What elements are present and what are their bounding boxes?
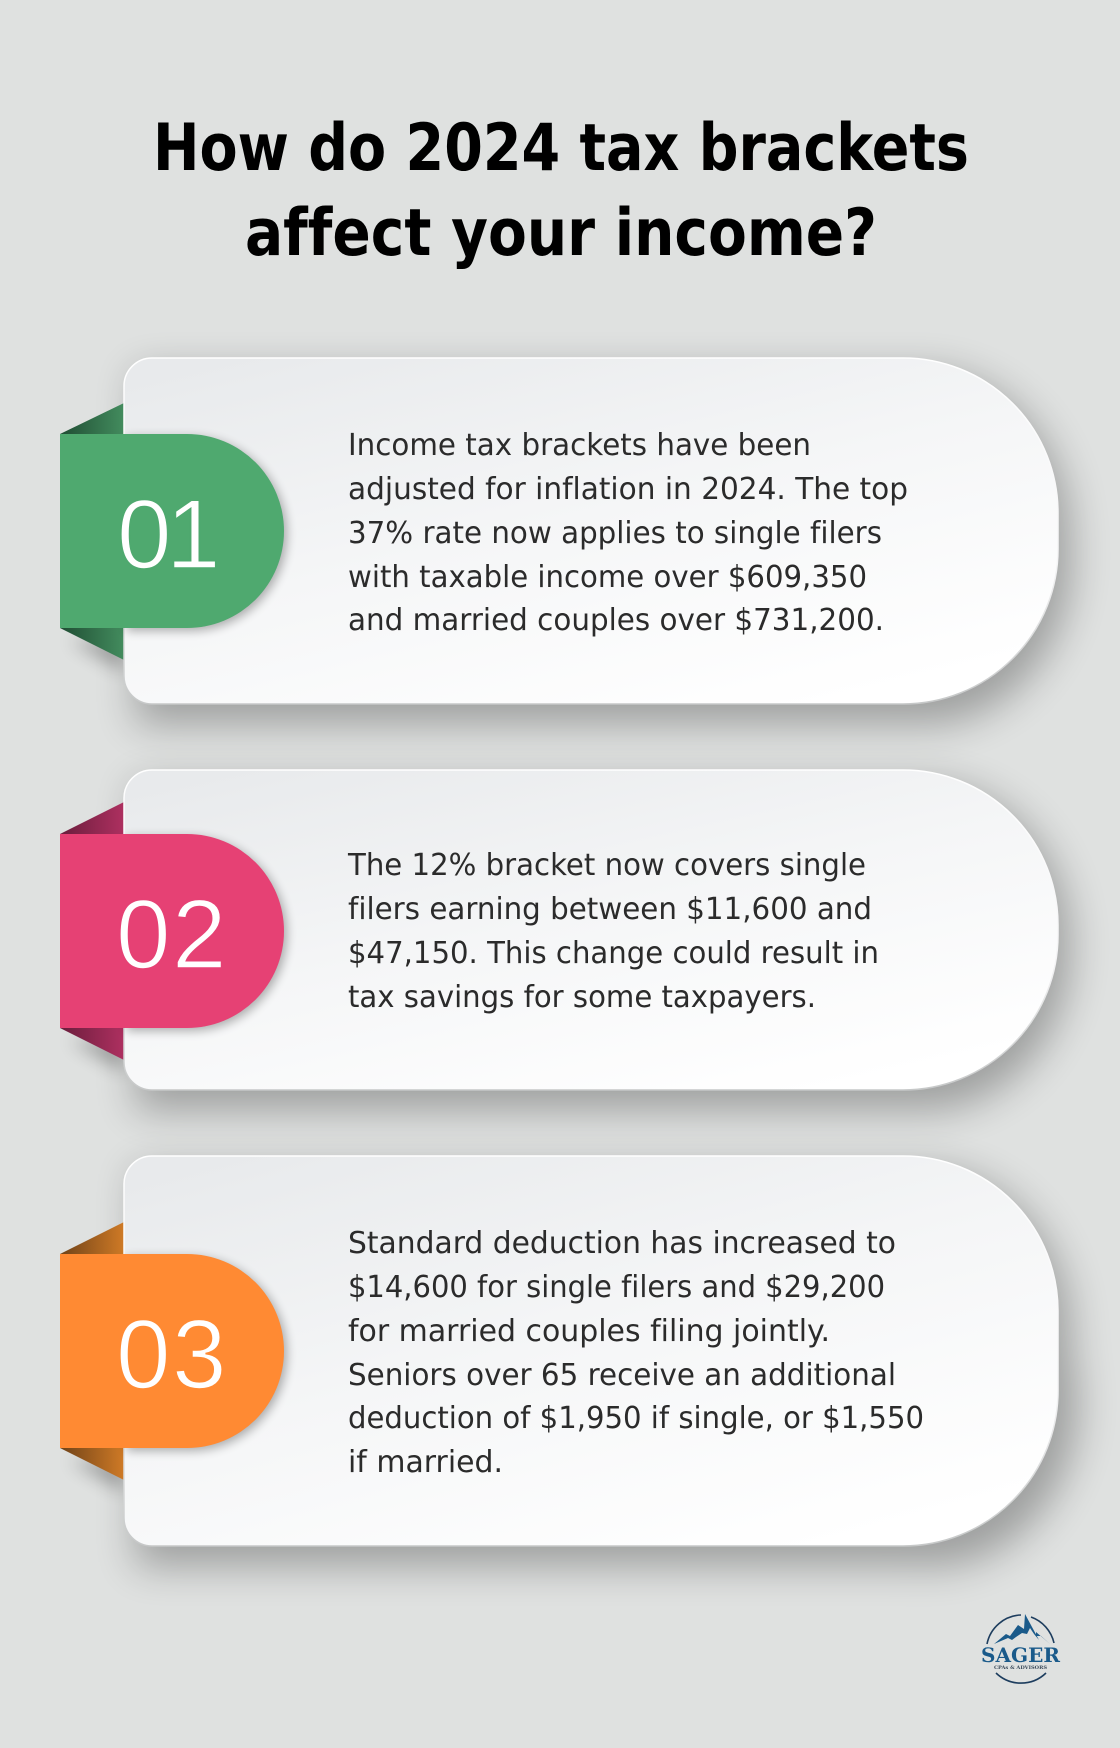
number: 03: 3: [172, 1299, 227, 1409]
icon: Sager logo: SAGER: [981, 1643, 1060, 1667]
text: step 03: if married.: [348, 1445, 503, 1480]
text: step 02: The 12% bracket now covers single: [347, 848, 866, 883]
text: step 01: [348, 428, 908, 638]
text: step 02: $47,150. This change could result in: [348, 936, 879, 971]
text: step 01: and married couples over $731,200.: [348, 603, 884, 638]
text: step 01: with taxable income over $609,350: [348, 560, 867, 595]
title: affect your income?: [245, 196, 877, 271]
number: 02: 2: [172, 879, 227, 989]
panel: step 03: [60, 1156, 1078, 1567]
badge: step 02: [60, 834, 284, 1028]
text: step 01: adjusted for inflation in 2024. The top: [348, 472, 908, 507]
text: step 02: [347, 848, 879, 1015]
text: step 03: for married couples filing jointly.: [348, 1314, 830, 1349]
text: step 03: deduction of $1,950 if single, or $1,550: [348, 1401, 924, 1436]
number: 01: 0: [117, 479, 172, 589]
text: step 01: Income tax brackets have been: [348, 428, 811, 463]
text: step 01: 37% rate now applies to single filers: [348, 516, 882, 551]
number: 01: 1: [166, 479, 221, 589]
card: step 02: [124, 770, 1058, 1090]
number: 03: 0: [116, 1299, 171, 1409]
text: step 03: $14,600 for single filers and $29,200: [348, 1270, 885, 1305]
icon: Sager logo: CPAs & ADVISORS: [994, 1665, 1047, 1671]
badge: step 03: [60, 1254, 284, 1448]
title: [153, 111, 969, 271]
text: step 03: Seniors over 65 receive an additional: [348, 1358, 896, 1393]
text: step 03: [348, 1226, 924, 1480]
icon: Sager logo: [981, 1614, 1060, 1683]
fold: step 03: [60, 1222, 124, 1480]
card: step 03: [124, 1156, 1058, 1546]
text: step 03: Standard deduction has increased to: [348, 1226, 896, 1261]
panel: step 01: [60, 358, 1071, 725]
card: step 01: [124, 358, 1058, 704]
text: step 02: tax savings for some taxpayers.: [348, 980, 816, 1015]
fold: step 02: [60, 802, 124, 1060]
panel: step 02: [60, 770, 1070, 1110]
fold: step 01: [60, 403, 124, 660]
badge: step 01: [60, 434, 284, 628]
title: How do 2024 tax brackets: [153, 111, 969, 186]
number: 02: 0: [116, 879, 171, 989]
text: step 02: filers earning between $11,600 and: [348, 892, 872, 927]
